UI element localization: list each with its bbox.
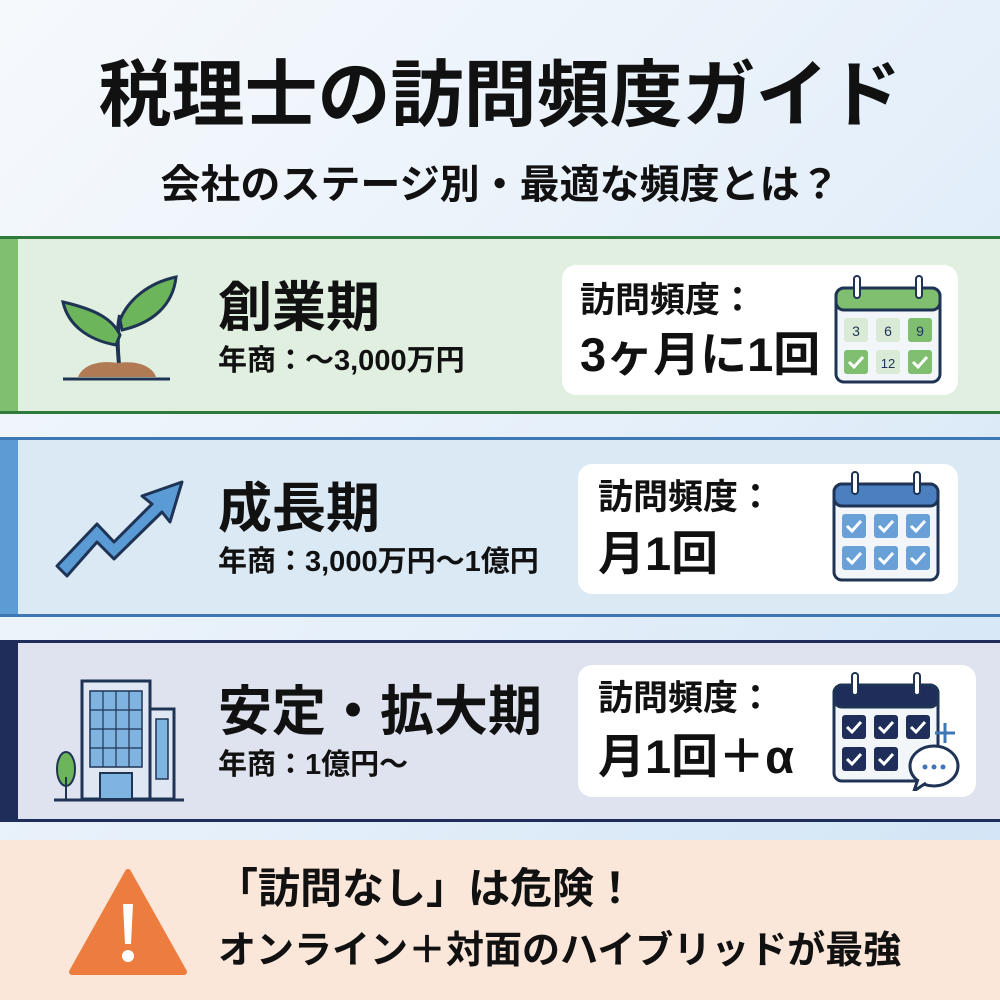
stage name: 創業期 [218, 278, 380, 338]
icon: calendar quarterly: 12 [881, 356, 895, 371]
icon: calendar quarterly: 9 [916, 323, 924, 339]
icon: calendar quarterly: 6 [884, 323, 892, 339]
icon: calendar quarterly [834, 275, 942, 384]
frequency box [578, 464, 958, 594]
label: 訪問頻度： [598, 478, 773, 517]
panel: growth stage [0, 437, 1000, 617]
icon: calendar monthly [832, 471, 940, 582]
frequency box [578, 665, 976, 797]
panel: startup stage [0, 236, 1000, 414]
frequency value: 3ヶ月に1回 [580, 328, 820, 381]
frequency value: 月1回＋α [598, 730, 794, 783]
revenue: 年商：〜3,000万円 [218, 345, 465, 377]
stage name: 安定・拡大期 [218, 682, 542, 742]
icon: calendar quarterly: 3 [852, 323, 860, 339]
revenue: 年商：3,000万円〜1億円 [218, 546, 539, 578]
label: 訪問頻度： [580, 281, 755, 320]
warning heading: 「訪問なし」は危険！ [216, 865, 636, 912]
subtitle: 会社のステージ別・最適な頻度とは？ [160, 163, 840, 207]
warning message: オンライン＋対面のハイブリッドが最強 [218, 930, 901, 972]
revenue: 年商：1億円〜 [218, 749, 408, 781]
panel: warning [0, 840, 1000, 1000]
frequency box [562, 265, 958, 395]
icon: building [54, 680, 184, 802]
label: 訪問頻度： [598, 679, 773, 718]
icon: warning triangle [69, 869, 187, 975]
stage name: 成長期 [218, 479, 380, 539]
icon: sprout [61, 275, 178, 380]
panel: stable expansion stage [0, 640, 1000, 822]
title: 税理士の訪問頻度ガイド [98, 55, 902, 136]
icon: calendar with chat [832, 672, 960, 791]
frequency value: 月1回 [598, 527, 718, 580]
icon: rising arrow [55, 480, 184, 578]
